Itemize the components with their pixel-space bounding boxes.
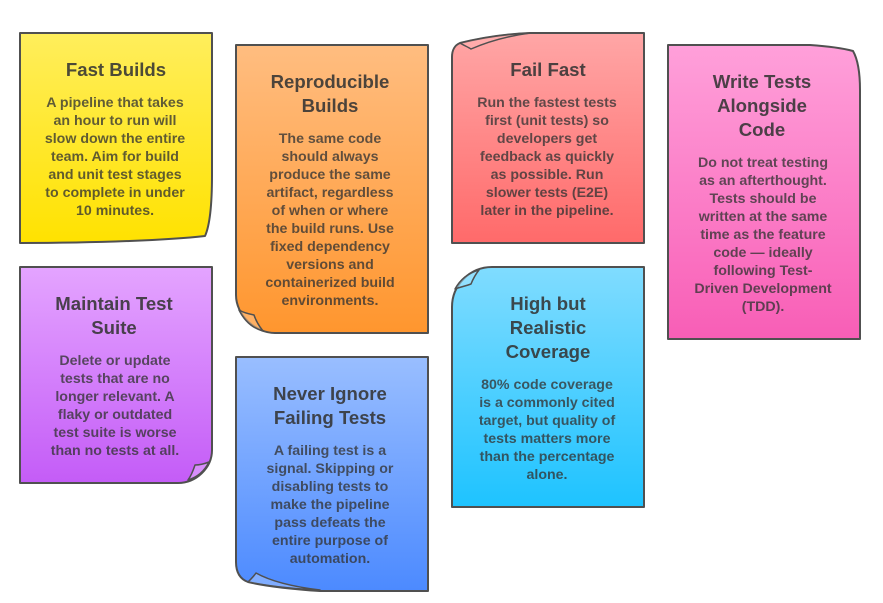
panel: Never Ignore Failing Tests <box>236 357 428 591</box>
text block: Reproducible Builds description: the build runs. Use <box>266 221 394 237</box>
heading: High but Realistic Coverage: Coverage <box>506 341 590 362</box>
text block: Fail Fast description: later in the pipeline. <box>480 203 614 219</box>
text block: Reproducible Builds description: artifact, regardless <box>267 185 394 201</box>
text block: Never Ignore Failing Tests description: entire purpose of <box>272 533 388 549</box>
text block: Maintain Test Suite description: Delete or update <box>59 353 171 369</box>
text block: Maintain Test Suite description: flaky or outdated <box>58 407 172 423</box>
text block: Fail Fast description: feedback as quickly <box>480 149 614 165</box>
text block: Write Tests Alongside Code description: time as the feature <box>700 227 826 243</box>
text block: Fail Fast description: developers get <box>497 131 597 147</box>
text block: Fail Fast description: first (unit tests) so <box>485 113 609 129</box>
text block: Write Tests Alongside Code description: code — ideally <box>713 245 813 261</box>
text block: Reproducible Builds description: produce the same <box>269 167 391 183</box>
heading: High but Realistic Coverage: High but <box>510 293 586 314</box>
note shape: pink <box>668 45 860 339</box>
note shape: cyan <box>452 267 644 507</box>
text block: High but Realistic Coverage description: 80% code coverage <box>481 377 613 393</box>
heading: Write Tests Alongside Code: Alongside <box>717 95 807 116</box>
icon: folded corner orange <box>239 310 263 331</box>
heading: Never Ignore Failing Tests: Failing Tests <box>274 407 386 428</box>
text block: Fail Fast description: as possible. Run <box>491 167 603 183</box>
text block: High but Realistic Coverage description: alone. <box>526 467 568 483</box>
text block: Never Ignore Failing Tests description: signal. Skipping or <box>267 461 394 477</box>
icon: folded corner cyan <box>455 270 479 289</box>
icon: folded corner blue <box>248 573 320 590</box>
heading: Write Tests Alongside Code: Code <box>739 119 785 140</box>
icon: folded corner purple <box>188 462 209 480</box>
note shape: blue <box>236 357 428 591</box>
text block: High but Realistic Coverage description: is a commonly cited <box>479 395 615 411</box>
text block: Maintain Test Suite description: tests that are no <box>60 371 170 387</box>
note shape: orange <box>236 45 428 333</box>
text block: Never Ignore Failing Tests description: disabling tests to <box>272 479 389 495</box>
heading: Maintain Test Suite: Suite <box>91 317 137 338</box>
panel: Write Tests Alongside Code <box>668 45 860 339</box>
heading: Reproducible Builds: Reproducible <box>271 71 389 92</box>
panel: High but Realistic Coverage <box>452 267 644 507</box>
text block: Never Ignore Failing Tests description: automation. <box>290 551 370 567</box>
text block: High but Realistic Coverage description: target, but quality of <box>479 413 615 429</box>
text block: Write Tests Alongside Code description: following Test- <box>713 263 813 279</box>
note shape: red <box>452 33 644 243</box>
text block: Never Ignore Failing Tests description: make the pipeline <box>270 497 390 513</box>
text block: Write Tests Alongside Code description: Driven Development <box>694 281 832 297</box>
heading: Never Ignore Failing Tests: Never Ignore <box>273 383 387 404</box>
note shape: yellow <box>20 33 212 243</box>
text block: Maintain Test Suite description: than no tests at all. <box>51 443 179 459</box>
panel: Maintain Test Suite <box>20 267 212 483</box>
text block: Reproducible Builds description: The same code <box>279 131 381 147</box>
text block: Maintain Test Suite description: test suite is worse <box>53 425 177 441</box>
text block: Fast Builds description: team. Aim for build <box>51 149 179 165</box>
heading: High but Realistic Coverage: Realistic <box>510 317 586 338</box>
text block: Fast Builds description: slow down the entire <box>45 131 185 147</box>
text block: Reproducible Builds description: of when or where <box>272 203 388 219</box>
text block: Reproducible Builds description: versions and <box>286 257 374 273</box>
text block: Write Tests Alongside Code description: written at the same <box>698 209 827 225</box>
text block: Write Tests Alongside Code description: as an afterthought. <box>699 173 827 189</box>
text block: Fast Builds description: and unit test stages <box>48 167 182 183</box>
text block: Fast Builds description: 10 minutes. <box>76 203 154 219</box>
text block: High but Realistic Coverage description: than the percentage <box>480 449 615 465</box>
text block: Fast Builds description: A pipeline that takes <box>46 95 184 111</box>
text block: Write Tests Alongside Code description: (TDD). <box>742 299 784 315</box>
text block: Reproducible Builds description: fixed dependency <box>270 239 390 255</box>
panel: Reproducible Builds <box>236 45 428 333</box>
heading: Reproducible Builds: Builds <box>302 95 358 116</box>
text block: High but Realistic Coverage description: tests matters more <box>484 431 611 447</box>
text block: Reproducible Builds description: environments. <box>282 293 378 309</box>
text block: Fast Builds description: to complete in under <box>45 185 185 201</box>
text block: Fail Fast description: slower tests (E2E) <box>486 185 608 201</box>
text block: Write Tests Alongside Code description: Tests should be <box>710 191 817 207</box>
icon: folded corner red <box>460 33 530 49</box>
heading: Maintain Test Suite: Maintain Test <box>55 293 173 314</box>
text block: Fast Builds description: an hour to run will <box>54 113 176 129</box>
text block: Never Ignore Failing Tests description: A failing test is a <box>274 443 386 459</box>
heading: Fail Fast: Fail Fast <box>510 59 586 80</box>
panel: Fail Fast <box>452 33 644 243</box>
heading: Fast Builds: Fast Builds <box>66 59 166 80</box>
text block: Reproducible Builds description: should always <box>282 149 379 165</box>
text block: Reproducible Builds description: containerized build <box>265 275 395 291</box>
panel: Fast Builds <box>20 33 212 243</box>
text block: Fail Fast description: Run the fastest tests <box>477 95 617 111</box>
note shape: purple <box>20 267 212 483</box>
heading: Write Tests Alongside Code: Write Tests <box>713 71 811 92</box>
text block: Never Ignore Failing Tests description: pass defeats the <box>274 515 386 531</box>
text block: Write Tests Alongside Code description: Do not treat testing <box>698 155 828 171</box>
text block: Maintain Test Suite description: longer relevant. A <box>55 389 175 405</box>
